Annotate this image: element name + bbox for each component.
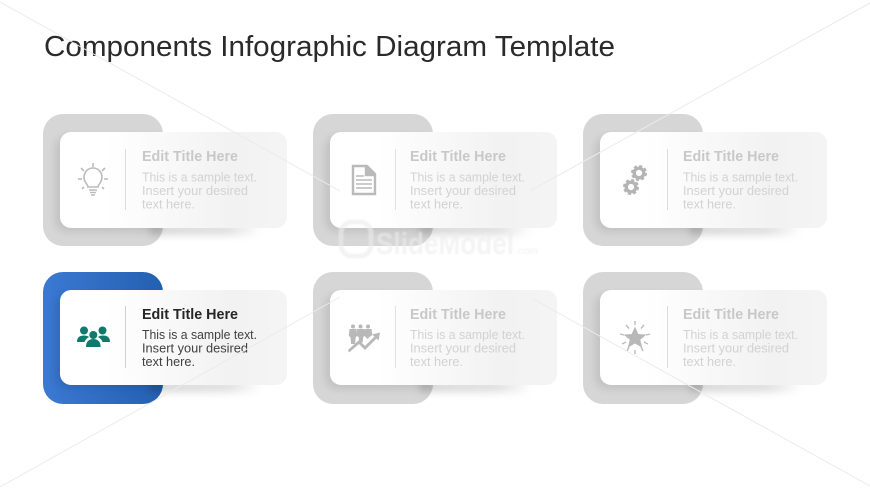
heading: Edit Title Here [142, 307, 238, 323]
text block: This is a sample text. [142, 327, 257, 342]
text block: text here. [142, 354, 195, 369]
panel: star [583, 272, 827, 404]
text block: Insert your desired [683, 183, 789, 198]
panel: document [313, 114, 557, 246]
text block [410, 170, 525, 212]
title: Components Infographic Diagram Template [44, 31, 615, 63]
text block: text here. [683, 196, 736, 212]
icon: gears [624, 166, 646, 194]
icon: document [353, 166, 375, 194]
icon: star burst [620, 321, 650, 354]
heading: Edit Title Here [410, 149, 506, 165]
text block: This is a sample text. [683, 170, 798, 184]
panel: gears [583, 114, 827, 246]
text block: text here. [410, 196, 463, 212]
text block: text here. [410, 354, 463, 369]
icon: team [77, 326, 110, 347]
text block: Insert your desired [142, 183, 248, 198]
text block [683, 327, 798, 369]
panel: team (active) [43, 272, 287, 404]
text block: Insert your desired [142, 340, 248, 356]
icon: growth team [348, 324, 380, 352]
panel: idea [43, 114, 287, 246]
text block [410, 327, 525, 369]
text block: text here. [683, 354, 736, 369]
heading: Edit Title Here [142, 149, 238, 165]
heading: Edit Title Here [683, 307, 779, 323]
text block: This is a sample text. [683, 327, 798, 342]
text block: Insert your desired [410, 340, 516, 356]
text block: This is a sample text. [410, 327, 525, 342]
text block [142, 327, 257, 369]
text block: text here. [142, 196, 195, 212]
watermark: .com [515, 246, 538, 257]
text block: Insert your desired [410, 183, 516, 198]
text block [683, 170, 798, 212]
heading: Edit Title Here [683, 149, 779, 165]
watermark: SlideModel [376, 226, 514, 261]
text block: Insert your desired [683, 340, 789, 356]
panel: growth [313, 272, 557, 404]
icon: light bulb [78, 163, 108, 195]
heading: Edit Title Here [410, 307, 506, 323]
text block: This is a sample text. [410, 170, 525, 184]
text block [142, 170, 257, 212]
text block: This is a sample text. [142, 170, 257, 184]
